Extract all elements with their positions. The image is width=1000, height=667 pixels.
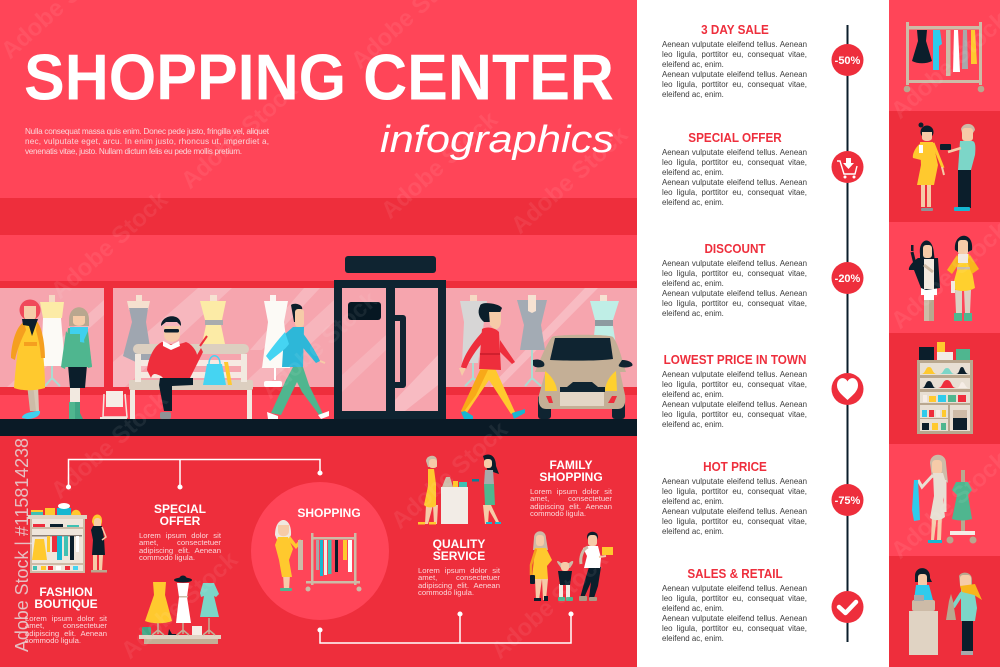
badge: heart icon xyxy=(832,373,864,405)
text: LOWEST PRICE IN TOWN xyxy=(664,352,806,367)
text: leo ligula, porttitor eu, consequat vitae, xyxy=(662,299,807,308)
text: HOT PRICE xyxy=(703,459,767,474)
intro text block: Nulla consequat massa quis enim. Donec pede justo, fringilla vel, aliquet xyxy=(25,127,270,136)
text: Aenean vulputate eleifend tellus. Aenean xyxy=(662,400,807,409)
text: SPECIAL OFFER xyxy=(688,130,782,145)
shopping bag beside bench xyxy=(203,356,232,385)
timeline xyxy=(846,25,848,642)
woman walking in red xyxy=(459,303,525,419)
text: quality service: commodo ligula. xyxy=(418,588,474,597)
clothes rack xyxy=(306,533,362,592)
text: Aenean vulputate eleifend tellus. Aenean xyxy=(662,370,807,379)
heading: family shopping: FAMILY xyxy=(550,458,592,472)
heading: quality service xyxy=(433,537,486,563)
text: quality service xyxy=(418,566,500,597)
small white bag xyxy=(100,391,127,419)
connector lines top xyxy=(67,460,322,489)
icon: clothes rack xyxy=(904,22,984,92)
shop windows xyxy=(0,288,637,387)
family scene xyxy=(530,531,613,601)
mannequin display xyxy=(139,576,221,644)
car xyxy=(533,335,633,419)
text: family shopping xyxy=(530,487,612,518)
text: Aenean vulputate eleifend tellus. Aenean xyxy=(662,614,807,623)
shopping circle xyxy=(251,482,389,620)
shopping woman with rack xyxy=(275,520,303,591)
heading: quality service: SERVICE xyxy=(433,549,485,563)
text: fashion boutique: amet, consectetuer xyxy=(25,621,107,630)
text: leo ligula, porttitor eu, consequat vitae, xyxy=(662,517,807,526)
woman with mannequin xyxy=(912,455,976,544)
faint stock watermarks: Adobe Stock xyxy=(376,106,504,224)
badge: check icon xyxy=(832,591,864,623)
heading: fashion boutique xyxy=(34,585,98,611)
text: Aenean vulputate eleifend tellus. Aenean xyxy=(662,507,807,516)
text: eleifend ac, enim. xyxy=(662,279,724,288)
faint stock watermarks: Adobe Stock xyxy=(176,76,304,194)
intro text block: nec, vulputate eget, arcu. In enim justo, rhoncus ut, imperdiet a, xyxy=(25,137,269,146)
text: Aenean vulputate eleifend tellus. Aenean xyxy=(662,40,807,49)
text: Aenean vulputate eleifend tellus. Aenean xyxy=(662,178,807,187)
badge: -75%: -75% xyxy=(835,495,861,507)
text: eleifend ac, enim. xyxy=(662,527,724,536)
text: eleifend ac, enim. xyxy=(662,168,724,177)
heading: fashion boutique: BOUTIQUE xyxy=(34,597,98,611)
mannequins in windows xyxy=(40,295,619,387)
text: family shopping: Lorem ipsum dolor sit xyxy=(530,487,612,496)
connector lines bottom xyxy=(318,612,573,643)
text: eleifend ac, enim. xyxy=(662,497,724,506)
fashion boutique shelf xyxy=(28,503,87,573)
badge: -50%: -50% xyxy=(835,55,861,67)
text: family shopping: adipiscing elit. Aenean xyxy=(530,502,612,511)
badge: -20% xyxy=(832,262,864,294)
text: eleifend ac, enim. xyxy=(662,634,724,643)
text: quality service: adipiscing elit. Aenean xyxy=(418,581,500,590)
woman in green sweater xyxy=(61,307,92,419)
intro text block: venenatis vitae, justo. Nullam dictum felis eu pede mollis pretium. xyxy=(25,147,242,156)
right column red strip xyxy=(889,0,1000,667)
text: eleifend ac, enim. xyxy=(662,60,724,69)
text: Aenean vulputate eleifend tellus. Aenean xyxy=(662,70,807,79)
text: eleifend ac, enim. xyxy=(662,198,724,207)
text: SALES & RETAIL xyxy=(687,566,783,581)
panel: 3 day sale xyxy=(662,22,807,99)
panel: lowest price in town xyxy=(662,352,807,429)
two women xyxy=(909,236,979,321)
text: family shopping: amet, consectetuer xyxy=(530,494,612,503)
faint stock watermarks: Adobe Stock xyxy=(116,546,244,664)
badge: -75% xyxy=(832,484,864,516)
woman and man exchanging item xyxy=(913,122,975,211)
man on bench xyxy=(147,316,207,419)
text: leo ligula, porttitor eu, consequat vitae, xyxy=(662,624,807,633)
text: eleifend ac, enim. xyxy=(662,90,724,99)
text: quality service: Lorem ipsum dolor sit xyxy=(418,566,500,575)
panel: hot price xyxy=(662,459,807,536)
sign above door xyxy=(345,256,436,273)
text: leo ligula, porttitor eu, consequat vitae, xyxy=(662,410,807,419)
boutique woman in black xyxy=(91,514,107,572)
text: Aenean vulputate eleifend tellus. Aenean xyxy=(662,259,807,268)
badge: -50% xyxy=(832,44,864,76)
subtitle: infographics xyxy=(380,119,614,161)
text: eleifend ac, enim. xyxy=(662,390,724,399)
text: fashion boutique: adipiscing elit. Aenean xyxy=(25,629,107,638)
shoe and hat shelf xyxy=(917,342,973,434)
text: fashion boutique: Lorem ipsum dolor sit xyxy=(25,614,107,623)
heading: special offer: OFFER xyxy=(160,514,200,528)
woman in yellow coat xyxy=(11,300,45,419)
text: fashion boutique: commodo ligula. xyxy=(25,636,81,645)
text: DISCOUNT xyxy=(704,241,766,256)
text: fashion boutique xyxy=(25,614,107,645)
text: quality service: amet, consectetuer xyxy=(418,573,500,582)
bench xyxy=(129,344,253,419)
heading: shopping: SHOPPING xyxy=(297,506,361,520)
heading: quality service: QUALITY xyxy=(433,537,485,551)
text: eleifend ac, enim. xyxy=(662,420,724,429)
faint stock watermarks: Adobe Stock xyxy=(386,416,514,534)
faint stock watermarks: Adobe Stock xyxy=(486,546,614,664)
text: special offer xyxy=(139,531,221,562)
text: leo ligula, porttitor eu, consequat vitae, xyxy=(662,158,807,167)
text: special offer: amet, consectetuer xyxy=(139,538,221,547)
faint stock watermarks: Adobe Stock xyxy=(46,386,174,504)
text: special offer: Lorem ipsum dolor sit xyxy=(139,531,221,540)
heading: special offer: SPECIAL xyxy=(154,502,206,516)
intro text block xyxy=(25,127,270,156)
text: leo ligula, porttitor eu, consequat vitae, xyxy=(662,80,807,89)
panel: special offer xyxy=(662,130,807,207)
text: eleifend ac, enim. xyxy=(662,309,724,318)
text: leo ligula, porttitor eu, consequat vitae, xyxy=(662,50,807,59)
text: Aenean vulputate eleifend tellus. Aenean xyxy=(662,477,807,486)
badge: -20%: -20% xyxy=(835,273,861,285)
door xyxy=(334,280,446,419)
text: leo ligula, porttitor eu, consequat vitae, xyxy=(662,487,807,496)
faint stock watermarks: Adobe Stock xyxy=(506,121,634,239)
cashier and customer xyxy=(909,568,982,655)
heading: family shopping xyxy=(539,458,603,484)
faint stock watermarks: Adobe Stock xyxy=(256,286,384,404)
text: Aenean vulputate eleifend tellus. Aenean xyxy=(662,289,807,298)
text: family shopping: commodo ligula. xyxy=(530,509,586,518)
service counter scene xyxy=(418,454,501,524)
text: Aenean vulputate eleifend tellus. Aenean xyxy=(662,584,807,593)
text: Aenean vulputate eleifend tellus. Aenean xyxy=(662,148,807,157)
text: leo ligula, porttitor eu, consequat vitae, xyxy=(662,188,807,197)
text: 3 DAY SALE xyxy=(701,22,769,37)
stock watermark vertical: Adobe Stock | #115814238 xyxy=(12,438,32,652)
badge: cart icon xyxy=(832,151,864,183)
heading: fashion boutique: FASHION xyxy=(39,585,93,599)
text: leo ligula, porttitor eu, consequat vitae, xyxy=(662,269,807,278)
text: special offer: adipiscing elit. Aenean xyxy=(139,546,221,555)
text: leo ligula, porttitor eu, consequat vitae, xyxy=(662,594,807,603)
man walking in blue xyxy=(266,304,329,419)
faint stock watermarks: Adobe Stock xyxy=(46,186,174,304)
panel: sales and retail xyxy=(662,566,807,643)
floor xyxy=(0,419,637,436)
text: eleifend ac, enim. xyxy=(662,604,724,613)
text: special offer: commodo ligula. xyxy=(139,553,195,562)
heading: special offer xyxy=(154,502,206,528)
text: leo ligula, porttitor eu, consequat vitae, xyxy=(662,380,807,389)
title: SHOPPING CENTER xyxy=(24,40,614,114)
heading: family shopping: SHOPPING xyxy=(539,470,603,484)
panel: discount xyxy=(662,241,807,318)
